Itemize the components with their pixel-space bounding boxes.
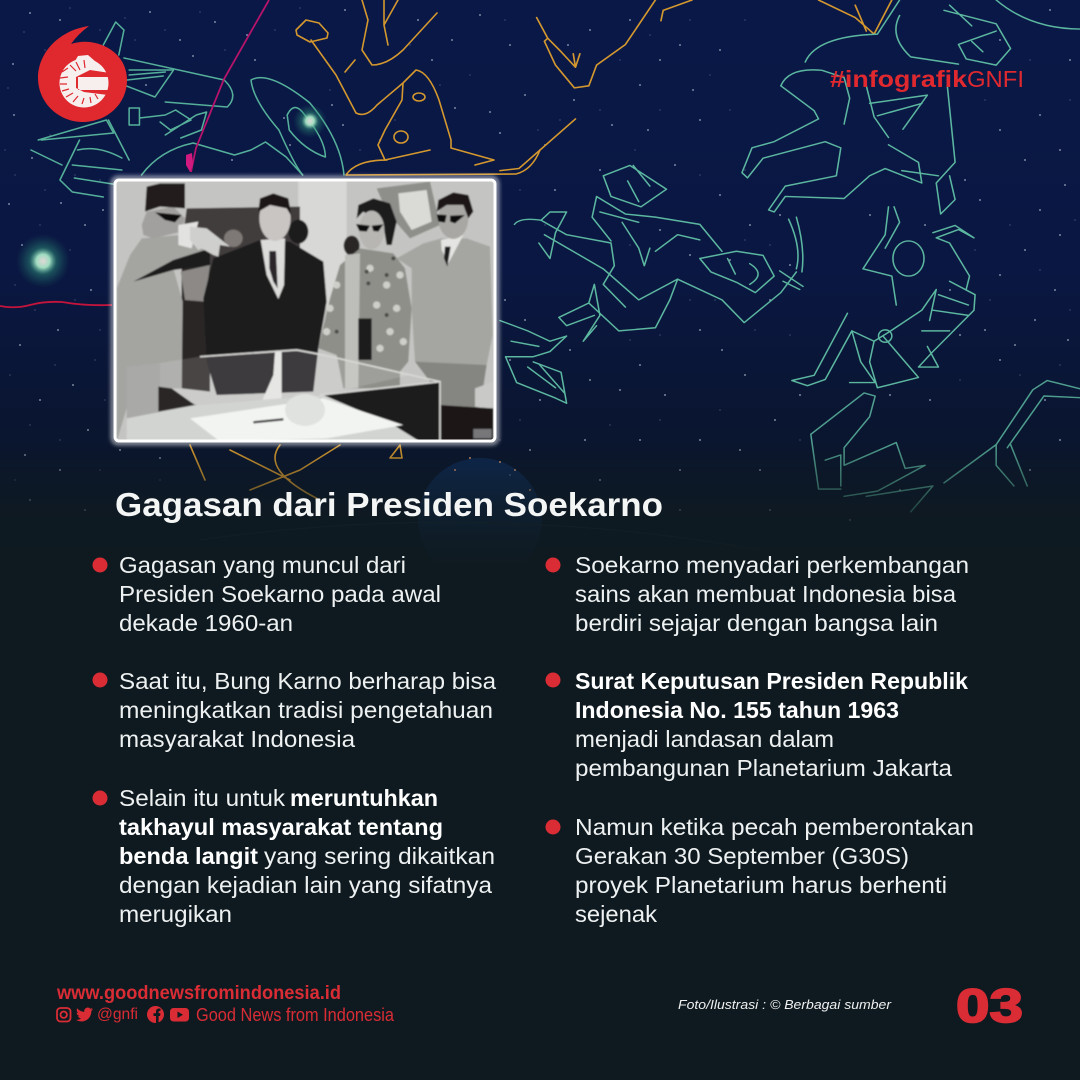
small creature constellation [500, 321, 567, 403]
nebula glow centre [293, 104, 327, 138]
bullet: tradisi pengetahuan: masyarakat Indonesia [119, 726, 355, 752]
model base [127, 395, 420, 442]
footer website: www.goodnewsfromindonesia.id [56, 983, 341, 1004]
constellation lines: teal left figures [31, 22, 344, 197]
hashtag infografikGNFI: GNFI [967, 66, 1024, 92]
bullet: surat keputusan [546, 668, 968, 781]
hashtag infografikGNFI [830, 66, 1024, 92]
nebula glow left [16, 234, 70, 288]
man in dark suit [203, 240, 327, 395]
bullet: tradisi pengetahuan: meningkatkan tradisi pengetahuan [119, 697, 493, 723]
bullet: takhayul: Selain itu untuk [119, 785, 286, 811]
woman in floral dress [318, 248, 412, 388]
bullet: sains: sains akan membuat Indonesia bisa [575, 581, 956, 607]
magenta boundary line [191, 0, 269, 172]
bullet: gagasan: Gagasan yang muncul dari [119, 552, 406, 578]
page name Good News from Indonesia: Good News from Indonesia [196, 1005, 395, 1025]
stars [9, 10, 1070, 520]
man in uniform [397, 238, 493, 365]
page number: 03 [956, 979, 1023, 1032]
wall [144, 182, 494, 439]
bullet: surat keputusan: pembangunan Planetarium Jakarta [575, 755, 952, 781]
bullet: G30S: Gerakan 30 September (G30S) [575, 843, 909, 869]
dark fade to bottom [0, 440, 1080, 565]
logo: GNFI [38, 26, 127, 122]
bullet: tradisi pengetahuan [92, 668, 496, 752]
stars, small and dim [5, 8, 1075, 480]
bullet: surat keputusan: menjadi landasan dalam [575, 726, 834, 752]
bullet: sains: berdiri sejajar dengan bangsa lain [575, 610, 938, 636]
photo: Soekarno viewing planetarium model [110, 175, 500, 445]
handle @gnfi: @gnfi [97, 1006, 138, 1023]
magenta blob [186, 153, 193, 172]
bullet: G30S: sejenak [575, 901, 658, 927]
reclining figure constellation [811, 381, 1080, 512]
seated figure constellation [792, 207, 975, 388]
planetarium dome silhouette [200, 458, 760, 582]
bullet: takhayul: dengan kejadian lain yang sifatnya [119, 872, 492, 898]
bullet: tradisi pengetahuan: Saat itu, Bung Karno berharap bisa [119, 668, 496, 694]
red boundary line [0, 302, 112, 307]
bullet: takhayul: meruntuhkan [290, 785, 438, 811]
bullet: gagasan [92, 552, 441, 636]
constellation lines: orange upper right [500, 0, 892, 171]
bullet: sains [546, 552, 969, 636]
bullet: G30S: Namun ketika pecah pemberontakan [575, 814, 974, 840]
icon: twitter [76, 1008, 93, 1021]
bullet: takhayul: yang sering dikaitkan [264, 843, 495, 869]
icon: instagram [57, 1008, 70, 1022]
constellation figures: teal right side [500, 0, 1080, 512]
dark floor [323, 382, 440, 442]
icon: youtube [170, 1008, 189, 1022]
bullet: surat keputusan: Indonesia No. 155 tahun 1963 [575, 697, 899, 723]
constellation lines: orange figures [190, 0, 540, 500]
bullet: takhayul: benda langit [119, 843, 258, 869]
bullet: G30S: proyek Planetarium harus berhenti [575, 872, 947, 898]
glass case [160, 352, 401, 402]
photo credit: Foto/Ilustrasi : © Berbagai sumber [678, 997, 892, 1012]
bullet: surat keputusan: Surat Keputusan Presiden Republik [575, 668, 968, 694]
heading: Gagasan dari Presiden Soekarno [115, 486, 663, 523]
perseus figure constellation [514, 165, 803, 341]
bullet: takhayul: takhayul masyarakat tentang [119, 814, 443, 840]
man in fez, pointing [117, 235, 210, 442]
flying figure constellation [742, 0, 1011, 214]
solid lower panel [0, 564, 1080, 1080]
bullet: takhayul: merugikan [119, 901, 232, 927]
hashtag infografikGNFI: #infografik [830, 66, 967, 92]
bullet: gagasan: dekade 1960-an [119, 610, 293, 636]
bullet: takhayul [92, 785, 495, 927]
icon: facebook [147, 1006, 164, 1023]
bullet: sains: Soekarno menyadari perkembangan [575, 552, 969, 578]
bullet: gagasan: Presiden Soekarno pada awal [119, 581, 441, 607]
bullet: G30S [546, 814, 974, 927]
